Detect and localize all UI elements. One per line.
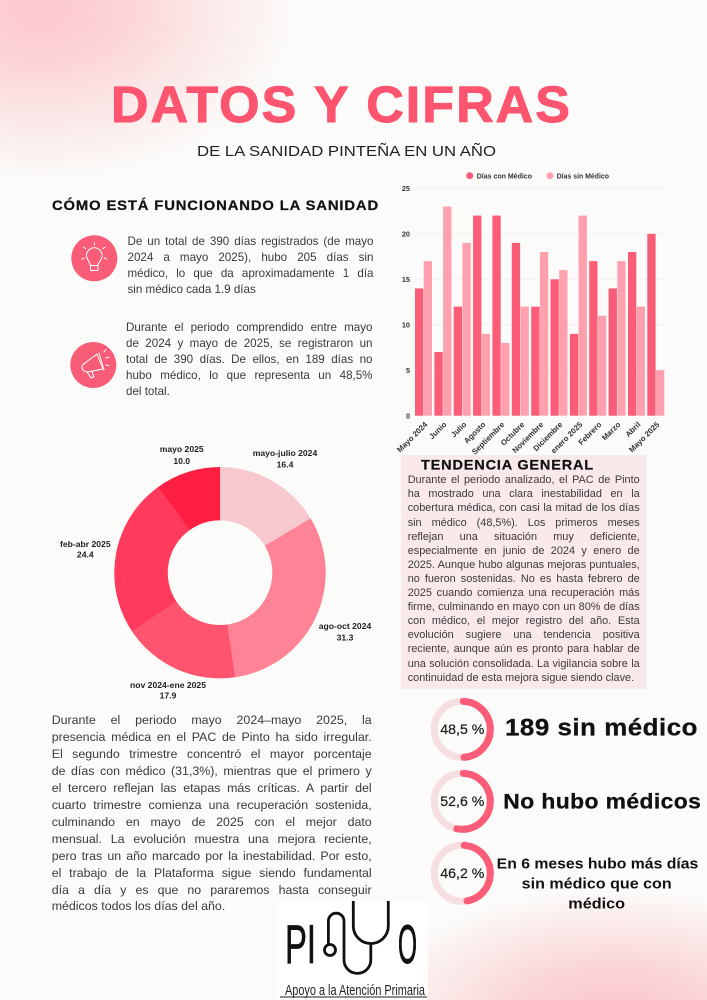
bar chart: días con y sin médico: Octubre — [499, 420, 527, 448]
legend — [466, 171, 609, 180]
text block: resumen del periodo: mensual. La evolución muestra una mejora reciente, — [52, 832, 372, 846]
heading: tendencia general: TENDENCIA GENERAL — [421, 456, 594, 472]
legend: Días con Médico — [477, 171, 532, 180]
icon: light bulb — [71, 235, 117, 281]
stat ring: 48,5 %: 48,5 % — [440, 721, 484, 737]
text block: resumen del periodo: cuarto trimestre comienza una recuperación sostenida, — [52, 798, 372, 812]
stat text: en 6 meses: En 6 meses hubo más días — [497, 855, 698, 872]
donut chart: distribución por periodos: nov 2024-ene 2025 — [130, 680, 206, 690]
text block: tendencia general: 2025. Aunque hubo algunas mejoras puntuales, — [408, 559, 640, 571]
stat text: no hubo médicos: No hubo médicos — [503, 789, 701, 813]
stat ring: 46,2 %: 46,2 % — [440, 865, 484, 881]
text block: tendencia general: especialmente en junio de 2024 y enero de — [408, 545, 640, 557]
donut chart: distribución por periodos: 17.9 — [160, 691, 177, 701]
text block: resumen del periodo: Durante el periodo mayo 2024–mayo 2025, la — [52, 713, 372, 727]
stat ring: 52,6 % — [433, 772, 491, 830]
heading: cómo está funcionando la sanidad: CÓMO ESTÁ FUNCIONANDO LA SANIDAD — [52, 196, 379, 213]
bar chart: días con y sin médico: Febrero — [577, 420, 604, 447]
stat ring: 46,2 % — [432, 843, 492, 903]
bar chart: días con y sin médico: Agosto — [462, 420, 488, 445]
donut chart: distribución por periodos: 10.0 — [173, 456, 190, 466]
text block: resumen del periodo — [52, 713, 372, 913]
bar chart: días con y sin médico: 10 — [402, 320, 410, 330]
stat text: en 6 meses — [497, 855, 698, 912]
text block: 189 días sin médico: de 2024 y mayo de 2025, se registraron un — [126, 337, 372, 350]
text block: resumen del periodo: el tercero reflejan las etapas más críticas. A partir del — [52, 781, 372, 795]
text block: 189 días sin médico: hubo médico, lo que representa un 48,5% — [126, 369, 372, 382]
logo: Pinto, apoyo a la atención primaria: O — [398, 913, 417, 975]
text block: tendencia general: reciente, aunque aún es pronto para hablar de — [408, 643, 640, 655]
text block: resumen del periodo: El segundo trimestre concentró el mayor porcentaje — [52, 747, 372, 761]
text block: tendencia general: con médico, el mejor registro del año. Esta — [408, 615, 640, 627]
text block: resumen del periodo: médicos todos los días del año. — [52, 899, 225, 913]
text block: resumen del periodo: pero tras un año marcado por la inestabilidad. Por esto, — [52, 849, 372, 863]
text block: 390 días registrados: 2024 a mayo 2025), hubo 205 días sin — [128, 251, 374, 264]
donut chart: distribución por periodos: 16.4 — [277, 459, 294, 469]
logo: Pinto, apoyo a la atención primaria: PI — [285, 913, 316, 975]
stat text: en 6 meses: médico — [568, 895, 625, 912]
icon: megaphone — [70, 342, 116, 388]
donut chart: distribución por periodos: 24.4 — [77, 549, 94, 559]
stat text: 189 sin médico: 189 sin médico — [505, 714, 698, 742]
panel: tendencia general background — [401, 455, 647, 689]
stat ring: 48,5 % — [433, 700, 491, 758]
bar chart: días con y sin médico: Mayo 2025 — [627, 420, 662, 454]
bar chart: días con y sin médico: 25 — [402, 184, 410, 193]
text block: resumen del periodo: de días con médico (31,3%), mientras que el primero y — [52, 764, 372, 778]
text block: 189 días sin médico: total de 390 días. De ellos, en 189 días no — [126, 353, 372, 366]
text block: tendencia general: ha mostrado una clara inestabilidad en la — [408, 488, 640, 500]
text block: 189 días sin médico: Durante el periodo comprendido entre mayo — [126, 321, 372, 334]
stat text: en 6 meses: sin médico que con — [522, 875, 672, 892]
donut chart: distribución por periodos: feb-abr 2025 — [60, 539, 111, 549]
bar chart: días con y sin médico: 5 — [406, 366, 410, 375]
text block: tendencia general: 2025 cuando comienza una recuperación más — [408, 587, 640, 599]
bar chart: días con y sin médico: Abril — [623, 420, 642, 439]
donut chart: distribución por periodos: ago-oct 2024 — [319, 621, 371, 631]
donut chart: distribución por periodos — [60, 444, 371, 701]
text block: 390 días registrados: De un total de 390 días registrados (de mayo — [128, 235, 374, 248]
bar chart: días con y sin médico: 15 — [402, 275, 410, 284]
bar chart: días con y sin médico: 20 — [402, 230, 410, 238]
legend: Días sin Médico — [557, 171, 609, 180]
text block: 189 días sin médico: del total. — [126, 385, 170, 398]
text block: resumen del periodo: día a día y es que no pararemos hasta conseguir — [52, 883, 372, 897]
text block: resumen del periodo: culminando en mayo de 2025 con el mejor dato — [52, 815, 372, 829]
text block: tendencia general: evolución sugiere una tendencia positiva — [408, 629, 640, 641]
bar chart: días con y sin médico: Noviembre — [511, 420, 546, 455]
bar chart: días con y sin médico: Septiembre — [470, 420, 507, 456]
text block: 390 días registrados: médico, lo que da aproximadamente 1 día — [128, 267, 374, 280]
text block: resumen del periodo: el trabajo de la Plataforma sigue siendo fundamental — [52, 866, 372, 880]
text block: tendencia general: una solución consolidada. La vigilancia sobre la — [408, 658, 640, 670]
bar chart: días con y sin médico: 0 — [406, 411, 410, 420]
title: DATOS Y CIFRAS — [111, 76, 572, 133]
text block: tendencia general: reflejan una situación muy deficiente, — [408, 531, 640, 543]
bar chart: días con y sin médico: Mayo 2024 — [395, 420, 430, 454]
bar chart: días con y sin médico — [395, 184, 664, 456]
donut chart: distribución por periodos: mayo 2025 — [160, 444, 204, 454]
bar chart: días con y sin médico: Julio — [449, 420, 469, 439]
subtitle: DE LA SANIDAD PINTEÑA EN UN AÑO — [197, 143, 496, 160]
donut chart: distribución por periodos: 31.3 — [337, 633, 354, 643]
text block: 390 días registrados — [128, 235, 374, 296]
text block: tendencia general — [408, 474, 640, 684]
text block: resumen del periodo: presencia médica en el PAC de Pinto ha sido irregular. — [52, 730, 372, 744]
bar chart: días con y sin médico: Diciembre — [531, 420, 565, 453]
bar chart: días con y sin médico: Junio — [427, 420, 449, 441]
logo: Pinto, apoyo a la atención primaria: Apoyo a la Atención Primaria — [285, 982, 425, 999]
text block: tendencia general: firme, culminando en mayo con un 80% de días — [408, 601, 640, 613]
text block: tendencia general: no fueron sostenidas. No es hasta febrero de — [408, 573, 640, 585]
text block: tendencia general: continuidad de esta mejora sigue siendo clave. — [408, 672, 634, 684]
text block: tendencia general: sin médico (48,5%). Los primeros meses — [408, 517, 640, 529]
stat ring: 52,6 %: 52,6 % — [440, 793, 484, 809]
text block: 189 días sin médico — [126, 321, 372, 398]
text block: 390 días registrados: sin médico cada 1.9 días — [128, 283, 256, 296]
bar chart: días con y sin médico: Marzo — [600, 420, 623, 442]
donut chart: distribución por periodos: mayo-julio 2024 — [253, 448, 317, 458]
bar chart: días con y sin médico: enero 2025 — [549, 420, 585, 455]
logo: Pinto, apoyo a la atención primaria — [278, 901, 428, 1000]
text block: tendencia general: cobertura médica, con casi la mitad de los días — [408, 502, 640, 514]
text block: tendencia general: Durante el periodo analizado, el PAC de Pinto — [408, 474, 640, 486]
